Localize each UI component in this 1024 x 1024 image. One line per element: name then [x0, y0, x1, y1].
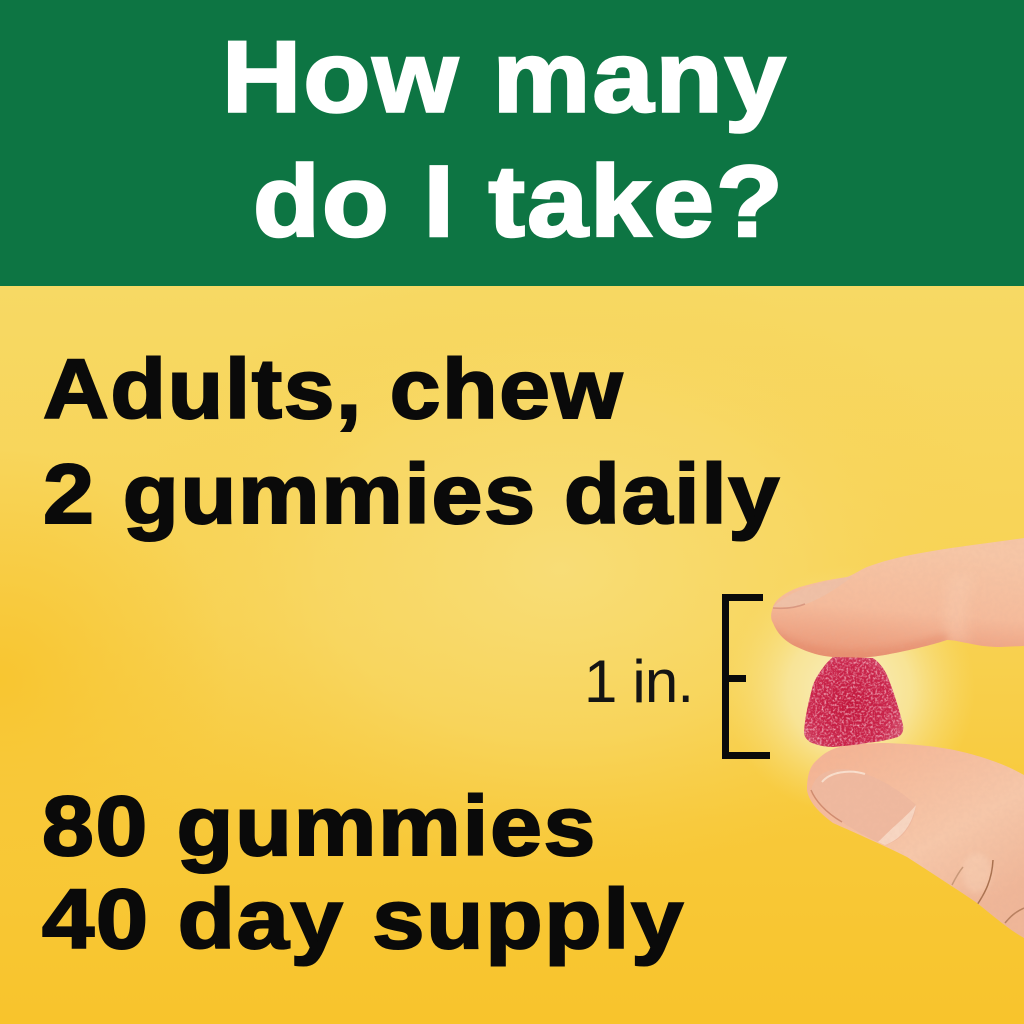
title: How many [222, 22, 788, 134]
icon: bottom finger [800, 740, 1024, 945]
title [222, 22, 788, 258]
supply text [42, 779, 685, 966]
size bracket [726, 598, 770, 756]
dosage text: 2 gummies daily [43, 447, 781, 541]
supply text: 80 gummies [42, 779, 597, 873]
icon: red gummy [804, 657, 904, 747]
size label: 1 in. [584, 648, 694, 715]
dosage text [43, 342, 781, 541]
icon: top finger [771, 538, 1024, 658]
dosage text: Adults, chew [43, 342, 624, 436]
supply text: 40 day supply [42, 872, 685, 966]
background panel [0, 286, 1024, 1024]
title: do I take? [253, 146, 785, 258]
header banner [0, 0, 1024, 286]
